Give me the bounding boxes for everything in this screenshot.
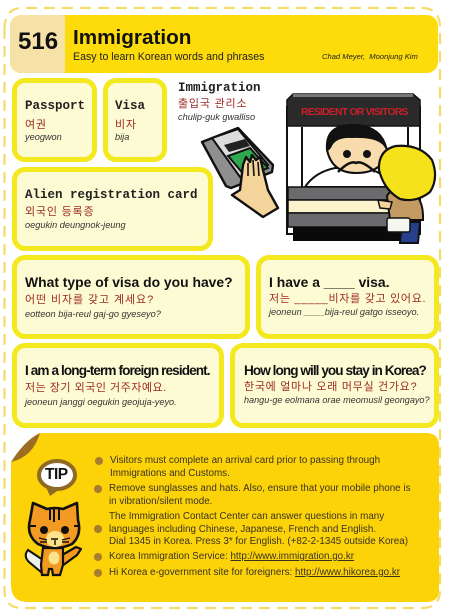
bullet 1: Immigrations and Customs. [110, 468, 230, 478]
card: length of stay: How long will you stay in Korea? [244, 363, 426, 378]
lesson number: 516 [18, 28, 58, 55]
card: passport: yeogwon [25, 132, 62, 142]
card: alien registration: 외국인 등록증 [25, 206, 94, 218]
card: visa type answer: 저는 _____비자를 갖고 있어요. [269, 293, 426, 305]
tip bullets [94, 455, 411, 578]
bullet 3: The Immigration Contact Center can answer questions in many [109, 511, 384, 522]
bullet 4: Korea Immigration Service: http://www.immigration.go.kr [109, 551, 354, 562]
card: visa type question [12, 255, 250, 339]
card: visa type question: 어떤 비자를 갖고 계세요? [25, 294, 154, 306]
card: length of stay: 한국에 얼마나 오래 머무실 건가요? [244, 381, 417, 393]
title: Immigration [73, 26, 191, 49]
card: long-term resident: I am a long-term foreign resident. [25, 363, 210, 378]
bullet 1: Visitors must complete an arrival card prior to passing through [110, 455, 380, 466]
card: passport: Passport [25, 99, 85, 113]
card: length of stay: hangu-ge eolmana orae meomusil geongayo? [244, 395, 430, 405]
bullet 1 [95, 455, 380, 478]
bullet 3: languages including Chinese, Japanese, French and English. [109, 524, 376, 534]
card: visa: 비자 [115, 119, 137, 131]
card: length of stay [230, 343, 439, 428]
authors: Chad Meyer, Moonjung Kim [322, 52, 418, 61]
officer [305, 168, 392, 187]
bullet 5: Hi Korea e-government site for foreigners: http://www.hikorea.go.kr [109, 567, 400, 578]
visitor [400, 222, 420, 243]
bullet 2: Remove sunglasses and hats. Also, ensure that your mobile phone is [109, 483, 411, 494]
illustration: immigration booth with officer and visitor [286, 93, 436, 244]
card: passport [12, 78, 97, 162]
card: visa: Visa [115, 99, 145, 113]
icon: tiger cat mascot [24, 502, 82, 576]
header band [10, 15, 438, 73]
card: visa type question: eotteon bija-reul gaj-go gyeseyo? [25, 309, 161, 319]
card: alien registration: Alien registration card [25, 188, 198, 202]
bullet 3 [94, 511, 408, 547]
card: visa [103, 78, 167, 162]
counter [288, 187, 419, 200]
card: long-term resident: jeoneun janggi oegukin geojuja-yeyo. [25, 397, 177, 407]
card: visa type answer: jeoneun ____bija-reul gatgo isseoyo. [269, 307, 419, 317]
bullet 2: in vibration/silent mode. [109, 496, 212, 506]
subtitle: Easy to learn Korean words and phrases [73, 51, 264, 63]
card: alien registration: oegukin deungnok-jeung [25, 220, 126, 230]
immigration vocabulary: 출입국 관리소 [178, 98, 247, 110]
immigration vocabulary: chulip-guk gwalliso [178, 112, 255, 122]
immigration vocabulary: Immigration [178, 81, 261, 95]
bullet 2 [94, 483, 411, 506]
card: long-term resident [12, 343, 224, 428]
lesson number panel [10, 15, 65, 73]
immigration vocabulary [178, 81, 261, 122]
card: alien registration [12, 167, 213, 251]
card: visa type answer: I have a ____ visa. [269, 274, 389, 290]
card: passport: 여권 [25, 119, 47, 131]
tip speech bubble [37, 459, 77, 496]
tip panel [11, 433, 439, 602]
card: visa type answer [256, 255, 439, 339]
illustration: fingerprint scanner and hand [200, 126, 280, 218]
sign text: RESIDENT OR VISITORS [301, 107, 408, 118]
card: long-term resident: 저는 장기 외국인 거주자예요. [25, 382, 167, 394]
card: visa: bija [115, 132, 129, 142]
tip label: TIP [45, 466, 68, 483]
card: visa type question: What type of visa do you have? [25, 274, 233, 290]
bullet 3: Dial 1345 in Korea. Press 3* for English. (+82-2-1345 outside Korea) [109, 536, 408, 547]
